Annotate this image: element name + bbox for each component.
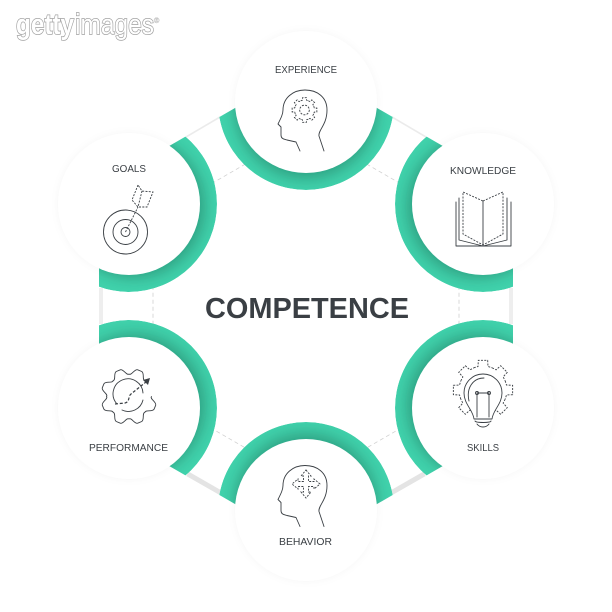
title: COMPETENCE (205, 293, 409, 325)
label: knowledge: KNOWLEDGE (450, 165, 516, 177)
label: performance: PERFORMANCE (89, 442, 168, 454)
white disc: knowledge (412, 133, 554, 275)
teal arc: skills (395, 320, 513, 476)
watermark: gettyimages: ® (154, 17, 160, 25)
white disc: behavior (235, 439, 377, 581)
outer hexagon band (101, 117, 511, 493)
watermark: gettyimages: images (75, 9, 154, 41)
white disc: goals (58, 133, 200, 275)
icon: open book (456, 192, 511, 246)
white disc: performance (58, 337, 200, 479)
label: skills: SKILLS (467, 442, 499, 454)
label: goals: GOALS (112, 163, 146, 175)
icon: head with gear (278, 90, 327, 151)
teal arc: experience (219, 108, 393, 190)
icon: lightbulb in gear (453, 360, 513, 427)
teal arc: goals (99, 136, 217, 292)
inner dashed hexagon (153, 129, 459, 483)
teal arc: knowledge (395, 136, 513, 292)
white disc: skills (412, 337, 554, 479)
label: experience: EXPERIENCE (275, 64, 337, 76)
label: behavior: BEHAVIOR (279, 536, 332, 548)
watermark: gettyimages: getty (16, 9, 74, 41)
watermark: gettyimages (16, 9, 160, 41)
icon: target with arrow (104, 185, 153, 254)
white disc: experience (235, 31, 377, 173)
teal arc: behavior (219, 422, 393, 504)
teal arc: performance (99, 320, 217, 476)
icon: head with arrows (278, 466, 327, 526)
icon: gear with arrow (100, 367, 158, 426)
